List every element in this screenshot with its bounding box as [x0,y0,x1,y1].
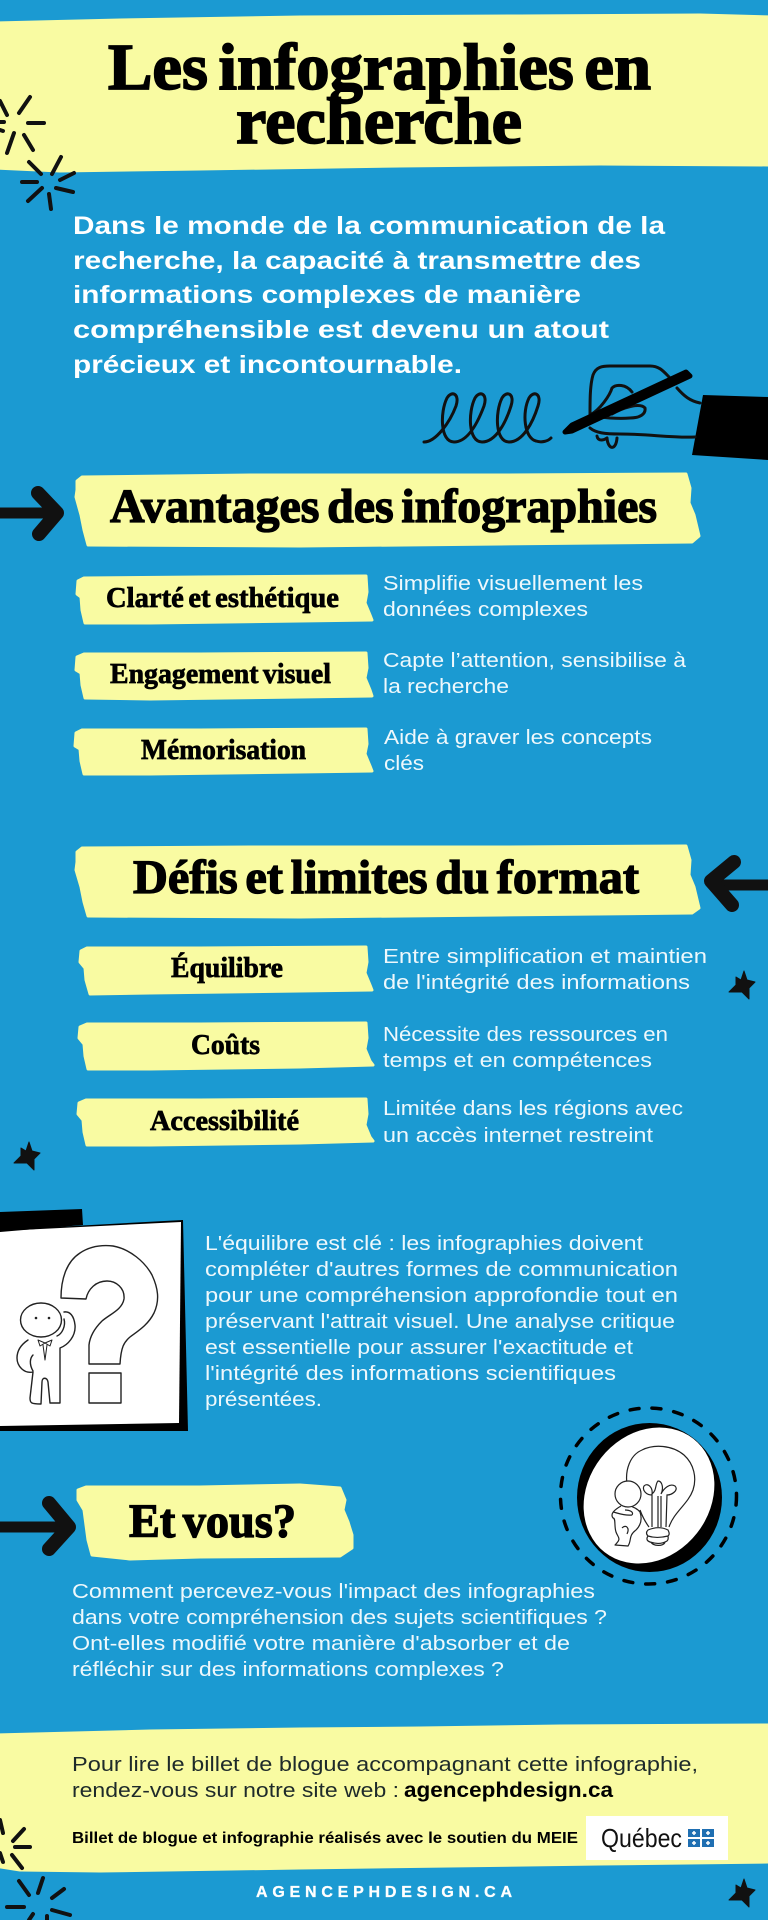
text: équilibre [383,945,707,994]
pill: accessibilité: Accessibilité [150,1106,299,1137]
pill: coûts: Coûts [191,1030,260,1061]
text: engagement: Capte l’attention, sensibilise à [383,649,687,672]
text: balance paragraph: L'équilibre est clé : les infographies doivent [205,1232,643,1255]
intro text: compréhensible est devenu un atout [73,316,610,344]
text: questions: réfléchir sur des informations complexes ? [72,1658,504,1681]
icon: star right [729,971,755,999]
title [108,31,651,158]
text: équilibre: Entre simplification et maintien [383,945,707,968]
text: questions [72,1580,607,1681]
pill: clarté [77,576,372,623]
text: coûts: Nécessite des ressources en [383,1023,668,1046]
text: questions: Comment percevez-vous l'impact des infographies [72,1580,595,1603]
text: clarté: données complexes [383,598,588,621]
text: accessibilité: Limitée dans les régions avec [383,1097,683,1120]
icon: burst bottom left [7,1878,70,1920]
heading: défis: Défis et limites du format [133,851,639,904]
text: mémorisation: Aide à graver les concepts [384,726,652,749]
footer band [0,1725,768,1871]
arrow right-pointing: avantages [0,493,58,534]
pill: équilibre: Équilibre [171,953,283,984]
icon: lightbulb in dashed circle [557,1401,741,1590]
heading: et vous: Et vous? [129,1495,296,1548]
pill: engagement: Engagement visuel [110,659,331,690]
icon: squiggle [424,394,551,442]
text: blog link: agencephdesign.ca [404,1779,613,1802]
text: balance paragraph: l'intégrité des informations scientifiques [205,1362,616,1385]
text: questions: Ont-elles modifié votre manière d'absorber et de [72,1632,570,1655]
pill: clarté: Clarté et esthétique [106,583,339,614]
icon: burst footer left [0,1820,30,1868]
text: funding note: Billet de blogue et infographie réalisés avec le soutien du MEIE [72,1830,578,1847]
intro text: recherche, la capacité à transmettre des [73,247,641,275]
text: clarté: Simplifie visuellement les [383,572,643,595]
text: balance paragraph: compléter d'autres formes de communication [205,1258,678,1281]
banner: et vous [78,1485,352,1559]
icon: hand writing with pen [565,366,768,460]
icon: burst top left [0,97,44,153]
text: mémorisation [384,726,652,775]
text: balance paragraph: présentées. [205,1388,322,1411]
icon: star bottom right [729,1879,755,1907]
heading: avantages: Avantages des infographies [110,480,657,533]
text: mémorisation: clés [384,752,424,775]
icon: star left [14,1142,40,1170]
text: accessibilité: un accès internet restreint [383,1124,653,1147]
pill: mémorisation: Mémorisation [141,735,306,766]
intro text: Dans le monde de la communication de la [73,212,666,240]
pill: accessibilité [78,1099,373,1145]
logo: Québec: Québec [601,1823,682,1853]
pill: coûts [79,1023,373,1069]
card: question mark illustration [0,1209,188,1431]
intro text [73,212,666,379]
text: équilibre: de l'intégrité des informations [383,971,690,994]
text: engagement: la recherche [383,675,509,698]
logo: Québec [586,1816,728,1860]
intro text: informations complexes de manière [73,281,581,309]
icon: burst under header [22,157,74,209]
header band [0,15,768,171]
banner: défis [76,846,699,917]
text: coûts [383,1023,668,1072]
text: blog link [72,1753,698,1802]
intro text: précieux et incontournable. [73,351,462,379]
text: coûts: temps et en compétences [383,1049,652,1072]
text: questions: dans votre compréhension des sujets scientifiques ? [72,1606,607,1629]
text: blog link: rendez-vous sur notre site web : [72,1779,399,1802]
text: balance paragraph: préservant l'attrait visuel. Une analyse critique [205,1310,675,1333]
text: engagement [383,649,687,698]
text: accessibilité [383,1097,683,1147]
pill: engagement [76,653,372,699]
title: Les infographies en [108,31,651,104]
pill: mémorisation [75,729,372,774]
text: balance paragraph: pour une compréhension approfondie tout en [205,1284,678,1307]
text: clarté [383,572,643,621]
title: recherche [236,85,522,158]
arrow left-pointing: défis [711,862,768,905]
text: balance paragraph [205,1232,678,1411]
text: balance paragraph: est essentielle pour assurer l'exactitude et [205,1336,633,1359]
arrow right-pointing: et vous [0,1503,69,1549]
footer brand: AGENCEPHDESIGN.CA [256,1884,512,1901]
banner: avantages [76,474,699,546]
pill: équilibre [80,947,372,994]
text: blog link: Pour lire le billet de blogue accompagnant cette infographie, [72,1753,698,1776]
